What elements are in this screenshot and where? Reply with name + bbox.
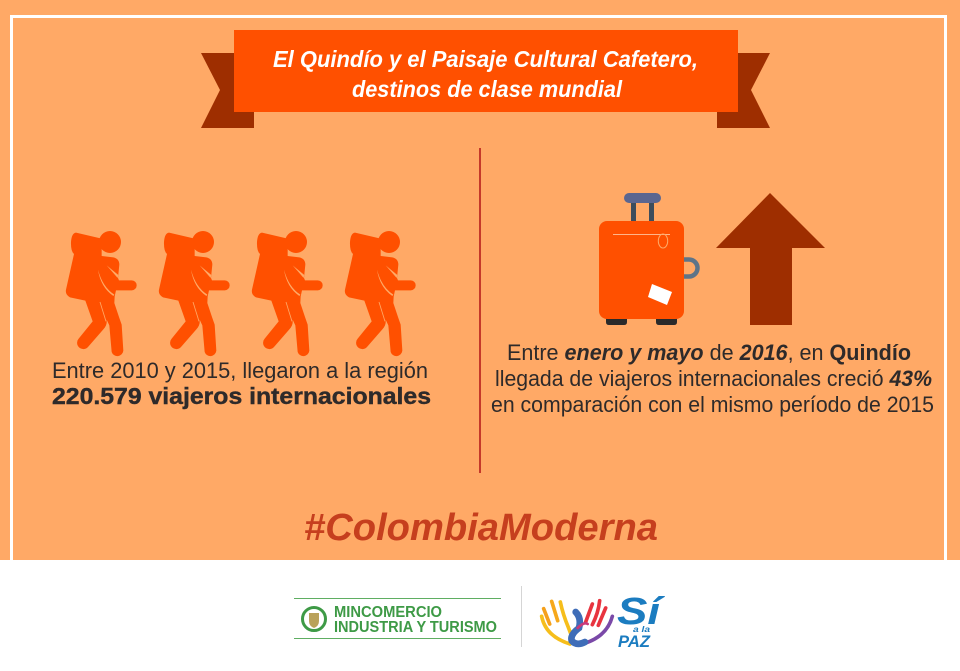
hashtag: #ColombiaModerna <box>304 507 658 549</box>
title banner: El Quindío y el Paisaje Cultural Cafetero, <box>273 46 698 72</box>
text: growth statement: Entre enero y mayo de 2016, en Quindío <box>507 340 911 365</box>
panel: travellers 2010-2015 <box>52 231 431 409</box>
logo: Sí a la Paz <box>542 591 665 651</box>
logo: Sí a la Paz: a la <box>633 625 651 634</box>
text: growth statement: en comparación con el mismo período de 2015 <box>491 392 934 417</box>
logo: Sí a la Paz: PAZ <box>618 632 651 651</box>
logo: Mincomercio: MINCOMERCIO <box>334 604 442 621</box>
title banner: destinos de clase mundial <box>352 76 623 102</box>
text: growth statement: llegada de viajeros internacionales creció 43% <box>495 366 932 391</box>
icon: suitcase <box>599 193 698 325</box>
text: travellers statement <box>52 358 431 409</box>
panel: growth in Quindío <box>491 193 934 417</box>
icon: up arrow <box>716 193 825 325</box>
icon: hikers with backpacks <box>66 231 416 356</box>
text: travellers statement: Entre 2010 y 2015, llegaron a la región <box>52 358 428 383</box>
footer logos <box>294 586 665 651</box>
logo: Mincomercio <box>294 598 501 638</box>
title banner <box>201 30 770 128</box>
text: growth statement <box>491 340 934 417</box>
logo: Sí a la Paz: Sí <box>617 591 665 633</box>
text: travellers statement: 220.579 viajeros internacionales <box>52 383 431 409</box>
logo: Mincomercio: INDUSTRIA Y TURISMO <box>334 619 497 636</box>
